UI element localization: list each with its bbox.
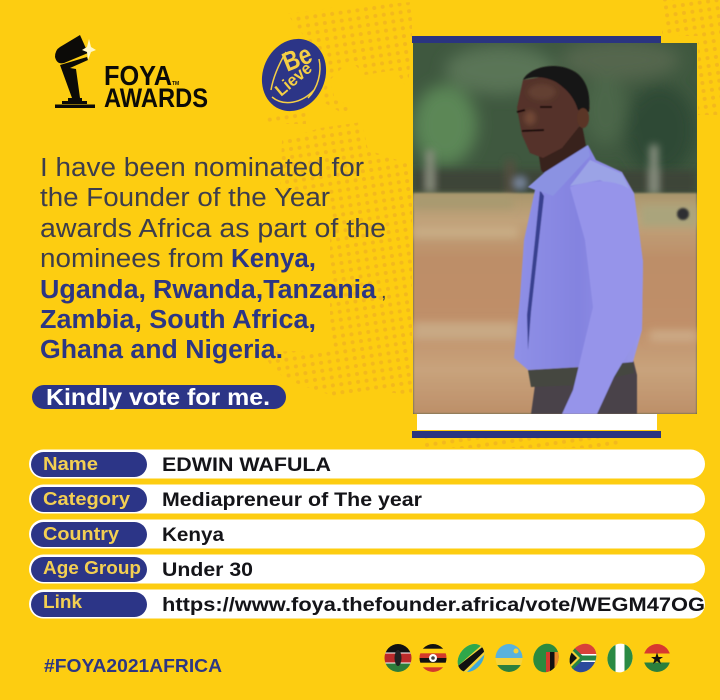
row: link: https://www.foya.thefounder.africa/vote/WEGM47OG xyxy=(162,594,705,616)
nomination statement: Rwanda,Tanzania xyxy=(153,276,377,304)
row: category: Category xyxy=(43,489,130,509)
nomination statement: , xyxy=(381,281,387,303)
shirt placket xyxy=(527,190,544,350)
row: country: Country xyxy=(43,524,119,544)
logo wordmark xyxy=(104,60,208,113)
logo: Believe badge: Lieve xyxy=(271,59,316,100)
row: country xyxy=(29,520,705,548)
nomination statement: nominees from xyxy=(40,245,224,273)
flag: Tanzania xyxy=(458,644,484,672)
logo wordmark: FOYA xyxy=(104,60,172,91)
row: link: Link xyxy=(43,592,83,612)
call to action pill: Kindly vote for me. xyxy=(46,384,270,410)
row: link xyxy=(29,590,705,618)
nose highlight xyxy=(524,111,536,125)
head xyxy=(517,74,590,158)
logo wordmark: TM xyxy=(172,81,179,87)
row: name xyxy=(29,450,705,478)
nomination statement: the Founder of the Year xyxy=(40,184,331,212)
nomination statement: Ghana and Nigeria. xyxy=(40,336,283,364)
white caption strip xyxy=(417,414,657,430)
nomination statement: Zambia, South Africa, xyxy=(40,306,316,334)
row: age group: Age Group xyxy=(43,558,141,578)
hashtag: #FOYA2021AFRICA xyxy=(44,655,222,676)
collar xyxy=(528,145,590,196)
flag: Zambia xyxy=(533,644,559,672)
row: category: Mediapreneur of The year xyxy=(162,489,422,511)
background object xyxy=(677,208,689,220)
row: category xyxy=(29,484,705,514)
logo: FOYA Awards xyxy=(55,35,208,113)
flag: Kenya xyxy=(384,644,412,672)
photo xyxy=(413,40,697,414)
flag: Uganda xyxy=(419,644,447,672)
portrait frame xyxy=(412,36,697,438)
flag: Rwanda xyxy=(495,644,523,672)
icon: star sparkle xyxy=(82,39,96,60)
belt xyxy=(528,363,633,388)
flag: Ghana xyxy=(643,644,671,672)
neck xyxy=(538,126,586,174)
figure xyxy=(514,66,643,414)
shirt torso xyxy=(514,145,643,370)
sleeve xyxy=(562,181,643,414)
frame top bar xyxy=(412,36,661,43)
flag: Nigeria xyxy=(607,644,633,672)
nomination statement: awards Africa as part of the xyxy=(40,215,386,243)
trousers xyxy=(531,355,637,414)
nomination statement: Uganda, xyxy=(40,276,146,304)
row: age group: Under 30 xyxy=(162,559,253,581)
frame bottom bar xyxy=(412,431,661,438)
row: name: Name xyxy=(43,454,98,474)
row: name: EDWIN WAFULA xyxy=(162,454,331,476)
flag: South Africa xyxy=(569,643,597,673)
details table xyxy=(29,450,705,618)
logo: Believe badge xyxy=(251,29,337,121)
ear xyxy=(577,108,589,128)
shirt highlight xyxy=(570,160,628,188)
nomination statement xyxy=(40,154,387,364)
country flags xyxy=(384,644,670,672)
row: age group xyxy=(29,554,705,584)
forehead highlight xyxy=(528,84,556,100)
eyes and mouth xyxy=(517,107,552,131)
hair xyxy=(523,66,589,112)
nomination statement: Kenya, xyxy=(231,245,316,273)
dotted world-map texture xyxy=(262,0,720,448)
icon: trophy spotlight xyxy=(55,35,95,108)
logo wordmark: AWARDS xyxy=(104,83,208,113)
nomination statement: I have been nominated for xyxy=(40,154,365,182)
logo: Believe badge: Be xyxy=(278,39,316,78)
row: country: Kenya xyxy=(162,524,224,546)
